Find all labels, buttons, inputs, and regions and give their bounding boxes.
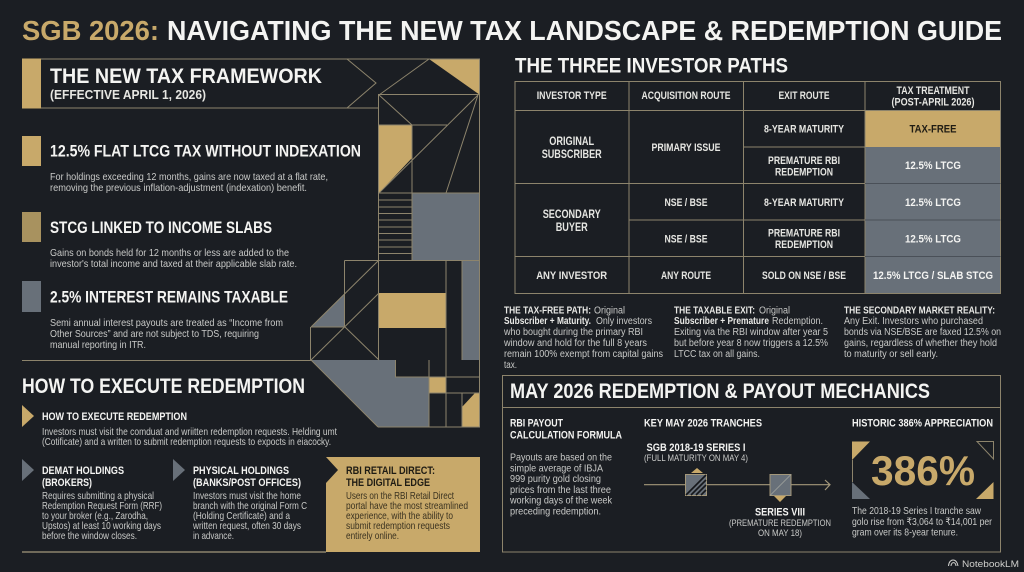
- row group: original subscriber: PRIMARY ISSUE: [652, 142, 720, 154]
- note: tax-free path: Only investors: [596, 316, 652, 327]
- item: interest taxable: manual reporting in ITR.: [50, 340, 146, 351]
- title: SGB 2026:: [22, 15, 159, 46]
- row group: original subscriber: 8-YEAR MATURITY: [764, 124, 845, 136]
- block: physical holdings: branch with the original Form C: [193, 501, 307, 512]
- column: payout formula: prices from the last three: [510, 485, 611, 496]
- banner: framework heading: THE NEW TAX FRAMEWORK: [50, 65, 322, 88]
- column: payout formula: RBI PAYOUT: [510, 418, 563, 430]
- note: taxable exit: Exiting via the RBI window after year 5: [674, 327, 828, 338]
- row group: secondary buyer: REDEMPTION: [775, 239, 833, 251]
- row: any investor: SOLD ON NSE / BSE: [762, 270, 846, 282]
- block: demat holdings: Requires submitting a physical: [42, 491, 154, 502]
- note: taxable exit: Redemption.: [772, 316, 823, 327]
- block: physical holdings: [173, 459, 307, 542]
- column: payout formula: CALCULATION FORMULA: [510, 430, 622, 442]
- block: demat holdings: to your broker (e.g., Zarodha,: [42, 511, 148, 522]
- header row: (POST-APRIL 2026): [892, 96, 975, 108]
- callout: RBI retail direct: submit redemption requests: [346, 521, 450, 532]
- row group: secondary buyer: 12.5% LTCG: [905, 197, 961, 209]
- title: NAVIGATING THE NEW TAX LANDSCAPE & REDEMPTION GUIDE: [167, 15, 1002, 46]
- callout: RBI retail direct: Users on the RBI Retail Direct: [346, 491, 454, 502]
- column: payout formula: [509, 418, 622, 518]
- column: historic appreciation: [852, 418, 994, 538]
- block: overview: (Cotificate) and a written to submit redemption requests to expocts in eiacocky.: [42, 437, 331, 448]
- note: tax-free path: remain 100% exempt from capital gains: [504, 349, 663, 360]
- note: secondary market reality: to maturity or sell early.: [844, 349, 938, 360]
- note: tax-free path: [503, 305, 663, 371]
- item: flat LTCG tax: 12.5% FLAT LTCG TAX WITHOUT INDEXATION: [50, 142, 361, 160]
- note: secondary market reality: THE SECONDARY MARKET REALITY:: [844, 305, 995, 316]
- header row: INVESTOR TYPE: [537, 90, 607, 102]
- marker: series I: [686, 468, 706, 496]
- marker: series VIII: [770, 474, 791, 502]
- note: tax-free path: window and hold for the full 8 years: [503, 338, 647, 349]
- row: any investor: ANY ROUTE: [661, 270, 711, 282]
- big number: 386%: [871, 447, 975, 494]
- panel: how to execute redemption: [22, 375, 480, 552]
- row group: secondary buyer: NSE / BSE: [664, 197, 708, 209]
- row: any investor: [536, 270, 993, 282]
- callout: RBI retail direct: experience, with the ability to: [346, 511, 453, 522]
- block: physical holdings: Investors must visit the home: [193, 491, 301, 502]
- row group: secondary buyer: [543, 197, 961, 251]
- column: payout formula: preceding redemption.: [510, 506, 601, 518]
- callout: RBI retail direct: entirely online.: [346, 531, 399, 542]
- banner: framework heading: (EFFECTIVE APRIL 1, 2026): [50, 88, 206, 102]
- note: tax-free path: Subscriber + Maturity.: [504, 316, 591, 327]
- column: key tranches timeline: (FULL MATURITY ON MAY 4): [644, 453, 748, 464]
- callout: RBI retail direct: [326, 457, 480, 552]
- row group: original subscriber: [542, 124, 961, 178]
- note: secondary market reality: bonds via NSE/BSE are faxed 12.5% on: [844, 327, 1001, 338]
- block: overview: Investors must visit the comduat and wriitten redemption requests. Helding umt: [42, 427, 337, 438]
- panel: three investor paths: [503, 54, 1001, 371]
- row group: original subscriber: TAX-FREE: [910, 124, 956, 136]
- item: interest taxable: 2.5% INTEREST REMAINS TAXABLE: [50, 288, 288, 306]
- callout: RBI retail direct: portal have the most streamlined: [346, 501, 468, 512]
- block: demat holdings: Upstos) at least 10 working days: [42, 521, 161, 532]
- table: [515, 82, 1000, 294]
- column: payout formula: working days of the week: [509, 496, 613, 506]
- item: interest taxable: Other Sources” and are not subject to TDS, requiring: [50, 329, 259, 340]
- row group: secondary buyer: 8-YEAR MATURITY: [764, 197, 845, 209]
- column: historic appreciation: HISTORIC 386% APPRECIATION: [852, 418, 993, 430]
- note: tax-free path: who bought during the primary RBI: [503, 327, 643, 338]
- block: demat holdings: (BROKERS): [42, 477, 92, 489]
- block: overview: HOW TO EXECUTE REDEMPTION: [42, 411, 187, 423]
- block: demat holdings: DEMAT HOLDINGS: [42, 465, 124, 477]
- block: physical holdings: PHYSICAL HOLDINGS: [193, 465, 289, 477]
- header row: EXIT ROUTE: [778, 90, 830, 102]
- row group: original subscriber: REDEMPTION: [775, 166, 833, 178]
- block: physical holdings: written request, often 30 days: [192, 521, 301, 532]
- header row: ACQUISITION ROUTE: [642, 90, 730, 102]
- column: historic appreciation: gram over its 8-year tenure.: [852, 528, 958, 538]
- note: taxable exit: LTCC tax on all gains.: [674, 349, 760, 360]
- column: payout formula: 999 purity gold closing: [510, 474, 601, 485]
- heading: HOW TO EXECUTE REDEMPTION: [22, 375, 305, 398]
- item: interest taxable: Semi annual interest payouts are treated as “Income from: [50, 318, 283, 329]
- note: tax-free path: tax.: [504, 360, 517, 371]
- column: payout formula: Payouts are based on the: [510, 453, 612, 464]
- block: overview: [22, 405, 337, 448]
- note: tax-free path: THE TAX-FREE PATH:: [504, 305, 591, 316]
- row group: original subscriber: 12.5% LTCG: [905, 160, 961, 172]
- row group: secondary buyer: BUYER: [556, 222, 588, 234]
- note: taxable exit: THE TAXABLE EXIT:: [674, 305, 755, 316]
- panel: May 2026 redemption and payout mechanics: [502, 376, 1000, 552]
- stat frame corners: [852, 442, 994, 499]
- column: key tranches timeline: (PREMATURE REDEMPTION: [729, 518, 831, 529]
- column: key tranches timeline: ON MAY 18): [758, 528, 802, 539]
- row group: secondary buyer: SECONDARY: [543, 209, 601, 221]
- heading: THE THREE INVESTOR PATHS: [515, 54, 788, 78]
- row group: secondary buyer: 12.5% LTCG: [905, 234, 961, 246]
- note: secondary market reality: Any Exit. Investors who purchased: [844, 316, 983, 327]
- note: taxable exit: Subscriber + Premature: [674, 316, 769, 327]
- item: flat LTCG tax: For holdings exceeding 12 months, gains are now taxed at a flat rate,: [50, 172, 328, 183]
- row: any investor: ANY INVESTOR: [536, 270, 607, 282]
- note: taxable exit: Original: [759, 305, 790, 316]
- tax treatment fills: [865, 110, 1000, 294]
- row group: original subscriber: ORIGINAL: [549, 136, 594, 148]
- note: tax-free path: Original: [594, 305, 625, 316]
- column: key tranches timeline: [644, 418, 831, 539]
- column: key tranches timeline: KEY MAY 2026 TRANCHES: [644, 418, 762, 430]
- row group: original subscriber: SUBSCRIBER: [542, 149, 602, 161]
- column: key tranches timeline: SERIES VIII: [755, 507, 805, 519]
- note: secondary market reality: [844, 305, 1001, 360]
- timeline arrow: [644, 480, 830, 490]
- item: flat LTCG tax: removing the previous inflation-adjustment (indexation) benefit.: [50, 183, 307, 194]
- row group: original subscriber: PREMATURE RBI: [768, 155, 840, 167]
- row group: secondary buyer: PREMATURE RBI: [768, 228, 840, 240]
- item: STCG income slabs: [22, 212, 297, 270]
- geometric decoration: [310, 59, 480, 427]
- column: payout formula: simple average of IBJA: [510, 464, 603, 474]
- banner: framework heading: [22, 58, 480, 108]
- item: STCG income slabs: Gains on bonds held for 12 months or less are added to the: [50, 248, 289, 259]
- block: physical holdings: (Holding Certificate) and a: [193, 511, 290, 522]
- item: STCG income slabs: investor's total income and taxed at their applicable slab rate.: [50, 259, 297, 270]
- row group: secondary buyer: NSE / BSE: [664, 234, 708, 246]
- header row: [537, 85, 975, 108]
- block: demat holdings: [22, 459, 162, 542]
- row: any investor: 12.5% LTCG / SLAB STCG: [873, 270, 993, 282]
- block: demat holdings: Redemption Request Form (RRF): [42, 501, 162, 512]
- callout: RBI retail direct: THE DIGITAL EDGE: [346, 477, 430, 489]
- block: demat holdings: before the window closes.: [42, 531, 137, 542]
- item: flat LTCG tax: [22, 136, 361, 194]
- panel: the new tax framework: [22, 58, 480, 351]
- block: physical holdings: in advance.: [193, 531, 234, 542]
- column: historic appreciation: The 2018-19 Series I tranche saw: [852, 506, 982, 517]
- column: key tranches timeline: SGB 2018-19 SERIES I: [646, 442, 746, 454]
- block: physical holdings: (BANKS/POST OFFICES): [193, 477, 301, 489]
- heading: MAY 2026 REDEMPTION & PAYOUT MECHANICS: [510, 380, 930, 403]
- NotebookLM mark: NotebookLM: [962, 559, 1019, 570]
- item: interest taxable: [22, 281, 288, 351]
- note: secondary market reality: gains, regardless of whether they hold: [844, 338, 997, 349]
- note: taxable exit: but before year 8 now triggers a 12.5%: [674, 338, 828, 349]
- note: taxable exit: [674, 305, 828, 360]
- callout: RBI retail direct: RBI RETAIL DIRECT:: [346, 465, 435, 477]
- item: STCG income slabs: STCG LINKED TO INCOME SLABS: [50, 219, 272, 237]
- header row: TAX TREATMENT: [896, 85, 970, 97]
- column: historic appreciation: golo rise from ₹3,064 to ₹14,001 per: [852, 517, 993, 528]
